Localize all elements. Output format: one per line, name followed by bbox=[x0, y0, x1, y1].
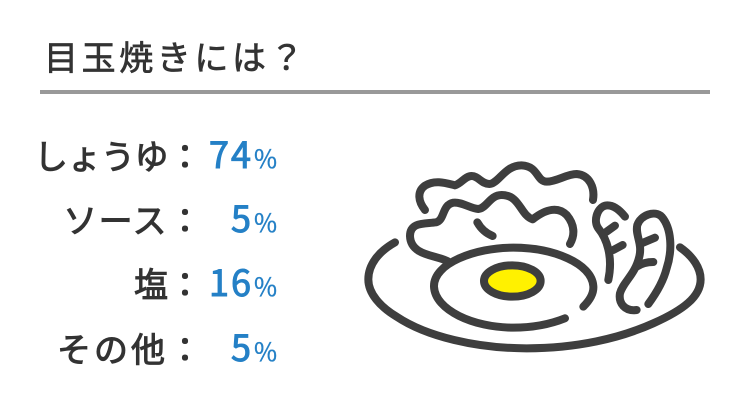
title: 目玉焼きには？ bbox=[44, 31, 307, 80]
title underline bbox=[40, 90, 710, 94]
label: salt: 塩： bbox=[134, 258, 202, 307]
label: sauce: ソース： bbox=[63, 194, 202, 243]
label: soy sauce: しょうゆ： bbox=[34, 130, 202, 179]
back lettuce bbox=[419, 165, 593, 210]
lettuce vein bbox=[477, 222, 493, 236]
left leaf bbox=[596, 205, 625, 280]
left leaf veins bbox=[607, 226, 623, 250]
label: other: その他： bbox=[57, 323, 202, 372]
value: soy sauce 74%: 74% bbox=[209, 127, 277, 179]
value: other 5%: 5% bbox=[231, 320, 277, 372]
plate bbox=[368, 242, 701, 348]
right leaf veins bbox=[637, 238, 655, 267]
egg white bbox=[434, 248, 593, 328]
egg yolk bbox=[484, 265, 541, 297]
value: salt 16%: 16% bbox=[209, 255, 277, 307]
value: sauce 5%: 5% bbox=[231, 191, 277, 243]
front lettuce bbox=[410, 195, 573, 262]
right leaf bbox=[620, 214, 670, 310]
